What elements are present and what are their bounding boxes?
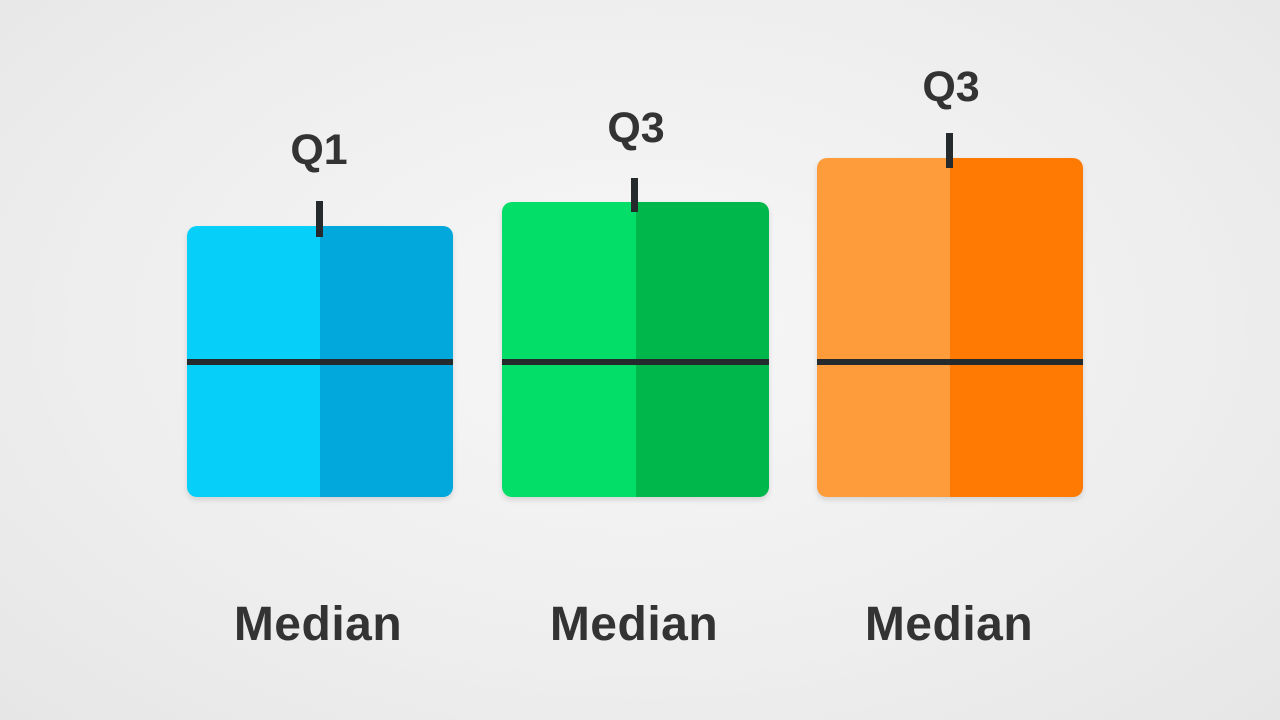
tick: blue <box>316 201 323 237</box>
label: Q1: Q1 <box>290 126 348 174</box>
tick: orange <box>946 133 953 168</box>
box: blue <box>187 226 453 497</box>
label: Q3 green: Q3 <box>607 104 665 152</box>
label: median green: Median <box>550 598 718 651</box>
label: median orange: Median <box>865 598 1033 651</box>
tick: green <box>631 178 638 212</box>
label: median blue: Median <box>234 598 402 651</box>
box: green <box>502 202 769 497</box>
label: Q3 orange: Q3 <box>922 63 980 111</box>
box: orange <box>817 158 1083 497</box>
